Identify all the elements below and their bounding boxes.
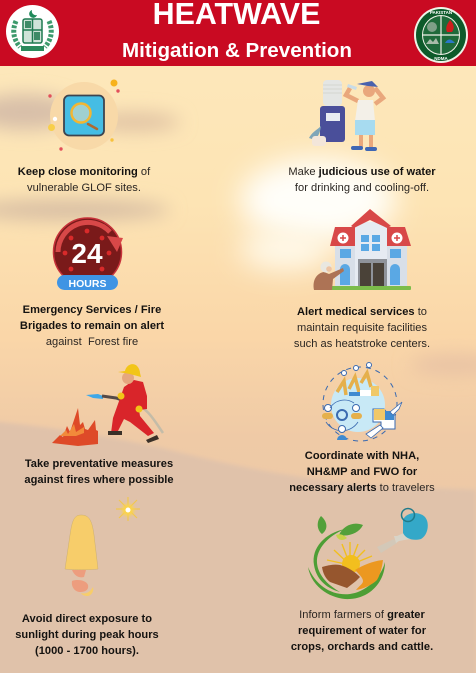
header banner [0,0,476,66]
text: emergency services [20,304,164,348]
text: emergency services: Emergency Services / Fire [23,304,161,316]
text: avoid sunlight: Avoid direct exposure to [22,613,152,625]
logo: NDMA [414,7,468,63]
icon: magnifier monitoring [48,80,120,151]
icon: farm and watering can [308,508,428,600]
text: monitoring: Keep close monitoring of [18,166,150,178]
logo: NDMA: NDMA [434,56,448,61]
logo: NDMA: PAKISTAN [430,10,452,15]
text: inform farmers: requirement of water for [298,625,426,637]
text: preventative measures [24,458,174,486]
text: water use: for drinking and cooling-off. [295,182,429,194]
text: coordination: necessary alerts to travelers [289,482,435,494]
text: emergency services: against Forest fire [46,336,138,348]
text: medical services: such as heatstroke centers. [294,338,430,350]
text: inform farmers [291,609,433,653]
icon: hospital with elderly person [314,209,411,290]
text: inform farmers: crops, orchards and cattle. [291,641,433,653]
text: emergency services: Brigades to remain on alert [20,320,164,332]
icon: 24 hours badge: 24 [71,238,103,269]
text: water use: Make judicious use of water [288,166,436,178]
text: monitoring [18,166,150,194]
icon: 24 hours badge: HOURS [69,278,106,290]
text: coordination: Coordinate with NHA, [305,450,419,462]
icon: firefighter and flames [52,364,164,446]
icon: 24 hours badge [52,217,123,290]
icon: closed umbrella with hand [64,514,98,596]
text: monitoring: vulnerable GLOF sites. [27,182,141,194]
icon: man drinking water by cooler [309,80,386,151]
text: avoid sunlight: (1000 - 1700 hours). [35,645,139,657]
text: avoid sunlight: sunlight during peak hours [15,629,159,641]
text: medical services: maintain requisite facilities [297,322,427,334]
text: water use [288,166,436,194]
icon: coordination circle [322,362,402,442]
text: preventative measures: against fires where possible [24,474,174,486]
text: preventative measures: Take preventative measures [25,458,173,470]
logo: Pakistan state emblem [6,5,59,58]
text: medical services [294,306,430,350]
text: coordination: NH&MP and FWO for [307,466,417,478]
subtitle: Mitigation & Prevention [122,39,352,62]
text: medical services: Alert medical services to [297,306,427,318]
text: coordination [289,450,435,494]
text: inform farmers: Inform farmers of greater [299,609,425,621]
text: avoid sunlight [15,613,159,657]
icon: sun glare [116,497,140,521]
